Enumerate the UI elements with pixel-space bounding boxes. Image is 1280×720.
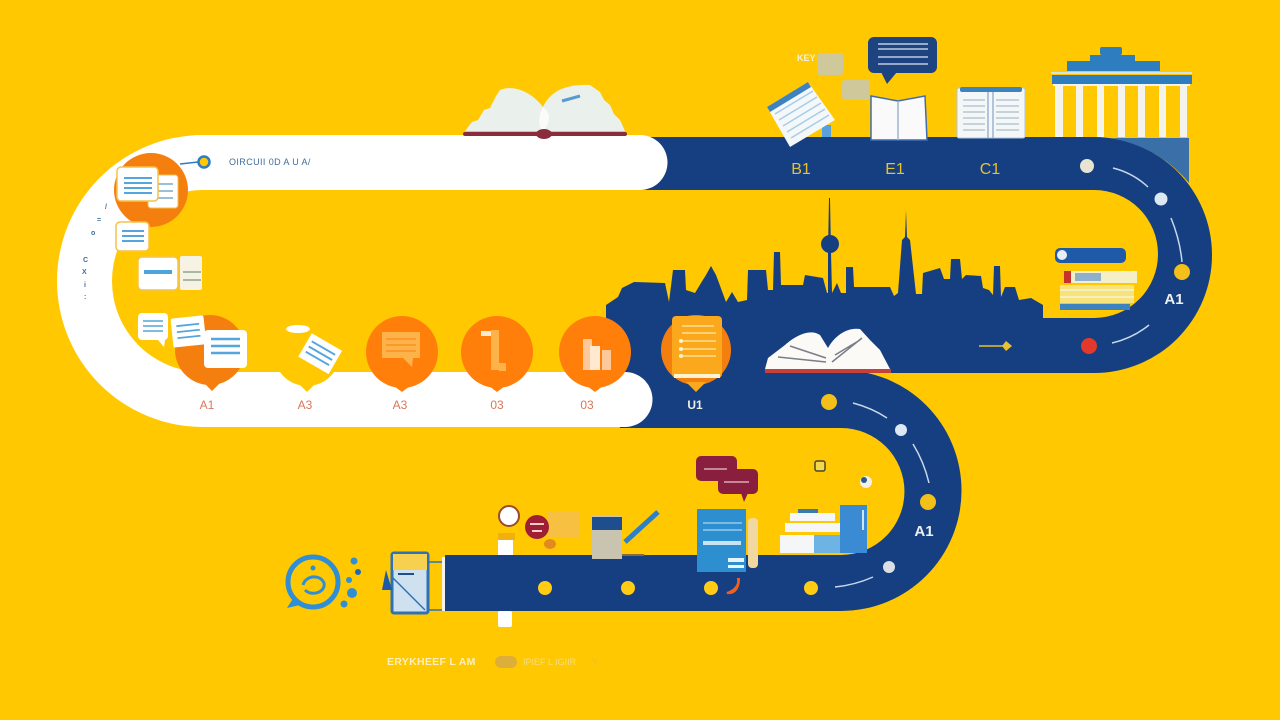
label: E1: E1 (885, 161, 905, 178)
small caption along the white curve: / (105, 204, 107, 211)
icon: tilted notebook (767, 82, 835, 147)
label: A1 right: A1 (1164, 291, 1184, 308)
arrow: yellow key (979, 341, 1012, 351)
icon: classical gate building (1051, 47, 1192, 137)
icon: blue speech bubble (868, 37, 937, 84)
route markers on upper curve (1112, 168, 1182, 343)
icon: orange bubble with pen tool (461, 316, 533, 392)
icon: small grey note cards (797, 53, 870, 100)
label: 03: 03 (490, 398, 504, 412)
marker: cream dot (1080, 159, 1094, 173)
footer caption: IPIEF L IGIIR (523, 657, 577, 667)
marker: pale dot (1154, 192, 1168, 206)
marker: yellow dot three (920, 494, 936, 510)
markers: yellow road dots (538, 581, 818, 595)
icon: blue document with maroon speech bubbles (696, 456, 758, 593)
small caption along the white curve: X (82, 269, 87, 276)
icon: small grey note cards: KEY (797, 53, 816, 63)
icon: grey desk with blue pencil (592, 512, 658, 559)
marker: yellow dot (1174, 264, 1190, 280)
label: A3: A3 (298, 398, 313, 412)
road heading with marker (180, 156, 311, 168)
icon: orange book bubble (661, 315, 731, 392)
label: A1: A1 (200, 398, 215, 412)
road: white beginner curve (57, 135, 667, 427)
icon: blue door at road start (382, 553, 445, 613)
icon: orange bubble with chat cards (138, 313, 247, 391)
road heading with marker: OIRCUII 0D A U A/ (229, 157, 311, 167)
top labels (791, 161, 1000, 178)
icon: open book on white road (463, 85, 627, 139)
road: upper blue curve with city skyline (606, 137, 1212, 373)
label: C1: C1 (980, 161, 1000, 178)
small caption along the white curve: o (91, 230, 95, 237)
icon: ship of paper stacks (780, 505, 867, 553)
icon: orange bubble with buildings (559, 316, 631, 392)
label: A1 lower: A1 (914, 523, 934, 540)
footer caption: ERYKHEEF L AM (387, 656, 476, 668)
label: A3 second: A3 (393, 398, 408, 412)
icon: orange circle with chat cards (114, 153, 188, 227)
small caption along the white curve: = (97, 217, 101, 224)
marker: pale dot four (883, 561, 895, 573)
icon: orange bubble with chat (366, 316, 438, 392)
marker: red dot (1081, 338, 1097, 354)
icon: open book white (871, 96, 927, 140)
road: lower blue curve (445, 370, 962, 611)
label: U1: U1 (687, 398, 703, 412)
marker: pale dot two (895, 424, 907, 436)
small caption along the white curve: C (83, 257, 88, 264)
marker: yellow dot one (821, 394, 837, 410)
footer caption (387, 656, 598, 668)
icon: stack of books (1055, 248, 1137, 310)
icon: blue swirl speech circle (287, 557, 361, 608)
icon: small yellow square (815, 461, 825, 471)
small caption along the white curve: i (84, 282, 86, 289)
route markers on lower curve (835, 403, 929, 587)
icon: open book on navy road (765, 329, 891, 373)
small caption along the white curve: : (84, 294, 86, 301)
icon: white pole with quote circles (498, 506, 579, 627)
icon: chat card (116, 222, 149, 251)
icon: yellow bubble with tilted card (274, 320, 342, 392)
small caption along the white curve (82, 204, 107, 301)
label: B1: B1 (791, 161, 811, 178)
footer caption: Y (592, 657, 598, 667)
icon: small eye (860, 476, 872, 488)
icon: open book with lines (957, 87, 1025, 138)
icon: chat cards pair (138, 256, 202, 290)
label: 03 third: 03 (580, 398, 594, 412)
